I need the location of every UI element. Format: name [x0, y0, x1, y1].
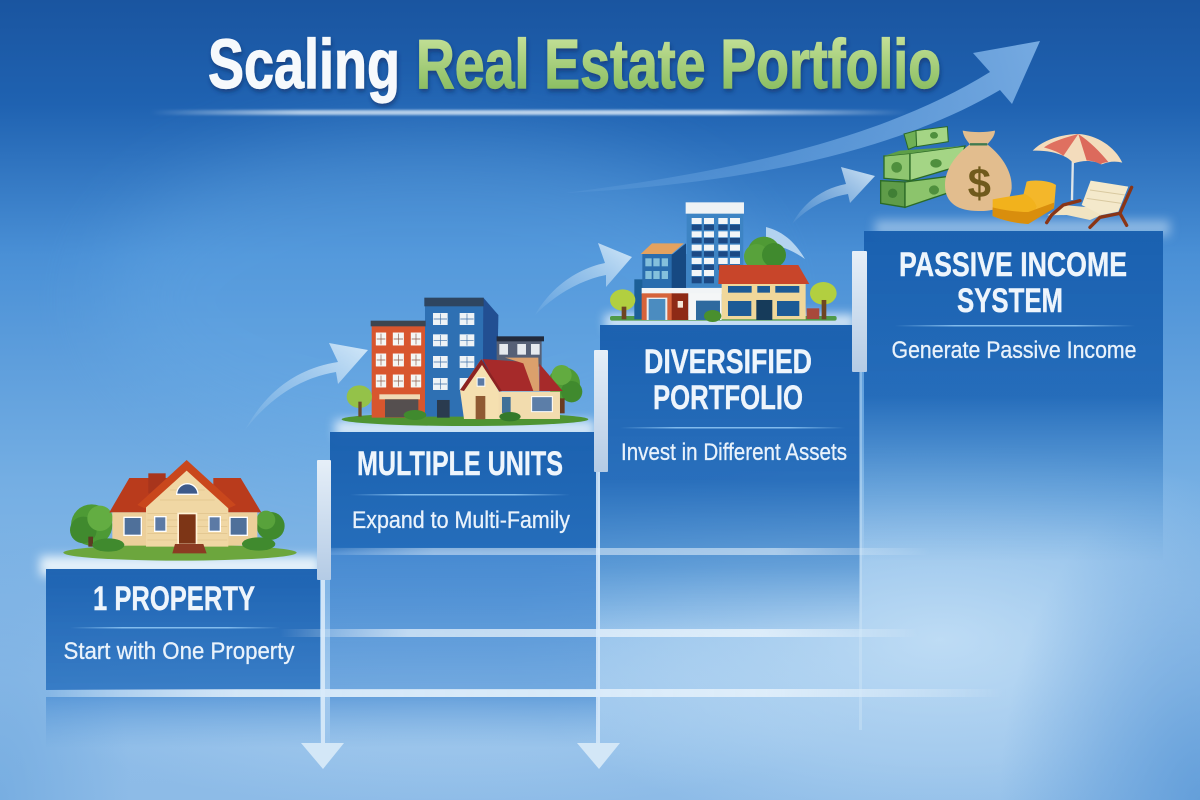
title: Scaling	[208, 25, 400, 103]
arrowhead 2	[577, 743, 620, 769]
title	[208, 25, 941, 103]
arrow: behind portfolio	[766, 227, 805, 259]
icon: apartment buildings	[342, 298, 588, 426]
heading: diversified portfolio: DIVERSIFIED	[644, 343, 812, 381]
heading: multiple units: MULTIPLE UNITS	[357, 445, 563, 483]
icon: mixed portfolio buildings	[610, 202, 837, 322]
text: expand to multi-family: Expand to Multi-Family	[352, 507, 570, 534]
money stacks	[881, 127, 965, 207]
heading: passive income system: PASSIVE INCOME	[899, 246, 1127, 284]
money bag	[945, 131, 1012, 211]
heading: passive income system	[899, 246, 1127, 320]
arrow: step 3 to 4	[792, 167, 875, 224]
text: start with one property: Start with One Property	[64, 638, 294, 665]
arrow: step 2 to 3	[535, 243, 632, 315]
icon: money, bag, chair, umbrella and lounger	[881, 127, 1132, 227]
heading: diversified portfolio: PORTFOLIO	[653, 379, 803, 417]
money bag: $	[968, 159, 991, 206]
arrowhead 1	[301, 743, 344, 769]
armchair	[993, 181, 1056, 224]
panel: passive income system	[864, 231, 1163, 561]
heading: 1 property: 1 PROPERTY	[93, 580, 255, 618]
ground highlights	[40, 220, 1170, 576]
text: invest in different assets: Invest in Different Assets	[621, 439, 847, 466]
arrow: step 1 to 2	[245, 343, 368, 430]
text: generate passive income: Generate Passive Income	[892, 337, 1136, 364]
umbrella	[1033, 134, 1122, 200]
panel: diversified portfolio	[600, 325, 860, 635]
icon: single house	[63, 460, 297, 561]
panel: multiple units	[330, 432, 598, 747]
heading: diversified portfolio	[644, 343, 812, 417]
step bars	[317, 251, 867, 580]
connecting lines and arrows	[46, 370, 1006, 769]
large rising arrow	[565, 41, 1040, 193]
heading: passive income system: SYSTEM	[957, 282, 1063, 320]
title: Real Estate Portfolio	[416, 25, 941, 103]
panel: 1 property	[46, 569, 320, 747]
lounger	[1047, 181, 1132, 227]
